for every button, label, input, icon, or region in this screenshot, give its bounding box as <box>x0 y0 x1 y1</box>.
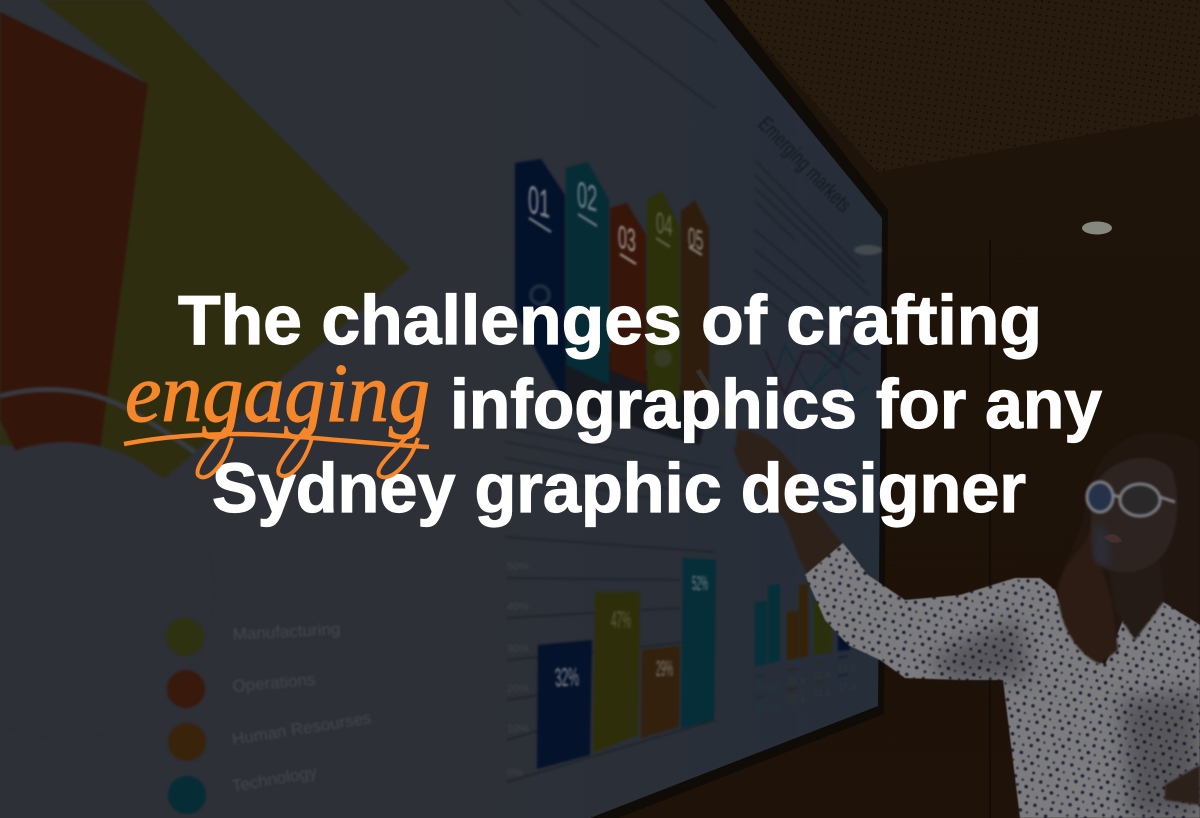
neck <box>1108 560 1165 640</box>
column 01: 01 <box>528 177 550 227</box>
legend: human resources: Human Resourses <box>231 708 373 749</box>
pie centre circle <box>0 442 213 738</box>
numbered arrow columns <box>515 159 710 445</box>
small bar chart: 22.3 <box>787 694 805 704</box>
ceiling <box>722 0 1200 172</box>
column 01 <box>515 159 565 402</box>
bar 52% <box>681 558 716 728</box>
legend: manufacturing <box>166 618 341 656</box>
column 04: 04 <box>656 207 673 244</box>
face <box>1091 458 1177 572</box>
bar 29% <box>641 646 680 738</box>
axis labels: 0% <box>507 767 523 779</box>
hair back <box>1056 432 1200 660</box>
axis labels: 10% <box>507 723 529 735</box>
hand-drawn underline <box>124 434 429 447</box>
pie segment: red <box>0 12 148 450</box>
screen frame <box>590 0 888 818</box>
heading: emerging markets: Emerging markets <box>754 111 857 217</box>
ceiling light <box>1082 222 1112 234</box>
small bar chart: 34.5K <box>754 702 780 713</box>
pointing presenter <box>698 370 1200 818</box>
legend <box>166 618 373 814</box>
legend: manufacturing: Manufacturing <box>232 619 341 644</box>
title line 1: The challenges of crafting <box>178 281 1042 359</box>
column 05: 05 <box>688 221 703 257</box>
pointer <box>698 370 735 430</box>
small bar chart <box>754 584 856 713</box>
column 03: 03 <box>618 219 636 260</box>
hair strands over shoulder <box>1058 530 1118 664</box>
screen surface <box>0 0 882 818</box>
pie segment: yellow <box>0 0 410 478</box>
bar 29%: 29% <box>656 656 673 681</box>
small bar chart: 34.5K <box>754 682 780 693</box>
axis labels: 40% <box>507 601 529 613</box>
column 05 <box>681 200 709 400</box>
column shadow <box>515 310 710 445</box>
small bar chart: 22.3 <box>787 676 805 686</box>
axis labels: 30% <box>507 643 529 655</box>
hand holding pointer <box>734 430 843 588</box>
legend: technology <box>168 762 319 814</box>
bar 32%: 32% <box>554 661 580 693</box>
axis labels <box>507 561 529 779</box>
bar 47% <box>593 592 640 753</box>
hand on hip <box>1165 765 1200 805</box>
wood panel seam <box>989 240 991 818</box>
legend: operations <box>167 670 316 708</box>
bar chart gridlines <box>505 537 715 782</box>
title <box>124 281 1102 527</box>
shirt fold shadows <box>930 620 1200 818</box>
legend: human resources <box>168 708 373 761</box>
small bar chart: 17.3 <box>838 664 856 674</box>
pie chart <box>0 0 410 738</box>
screen reflection <box>854 245 882 255</box>
presentation screen <box>0 0 888 818</box>
bar 52%: 52% <box>692 573 708 595</box>
axis labels: 20% <box>507 683 529 695</box>
line chart <box>765 320 880 410</box>
legend: operations: Operations <box>232 670 316 696</box>
face shadow side <box>1094 525 1110 566</box>
title line 3: Sydney graphic designer <box>212 449 1026 527</box>
legend: technology: Technology <box>230 762 319 796</box>
bar 32% <box>537 640 592 769</box>
side paragraph lines <box>755 160 870 375</box>
body text lines at top of screen <box>505 0 716 108</box>
small bar chart: 17.3 <box>838 682 856 692</box>
swash loops under the underline <box>197 428 418 477</box>
title line 2: infographics for any <box>450 365 1102 443</box>
column 02: 02 <box>577 175 597 221</box>
column 04 <box>647 191 680 400</box>
small bar chart: 21.4 <box>813 670 831 680</box>
glasses <box>1087 482 1175 516</box>
emphasised word: engaging: engaging <box>125 347 430 440</box>
axis labels: 50% <box>507 561 529 573</box>
bar 47%: 47% <box>611 607 631 634</box>
bar chart <box>505 537 716 782</box>
shirt sleeve and body <box>805 543 1200 818</box>
column 03 <box>610 203 646 385</box>
small bar chart: 21.4 <box>813 688 831 698</box>
pie ring arc <box>0 390 195 452</box>
lips <box>1104 534 1122 543</box>
paragraph lines above bar chart <box>505 428 720 500</box>
column 02 <box>566 162 609 385</box>
